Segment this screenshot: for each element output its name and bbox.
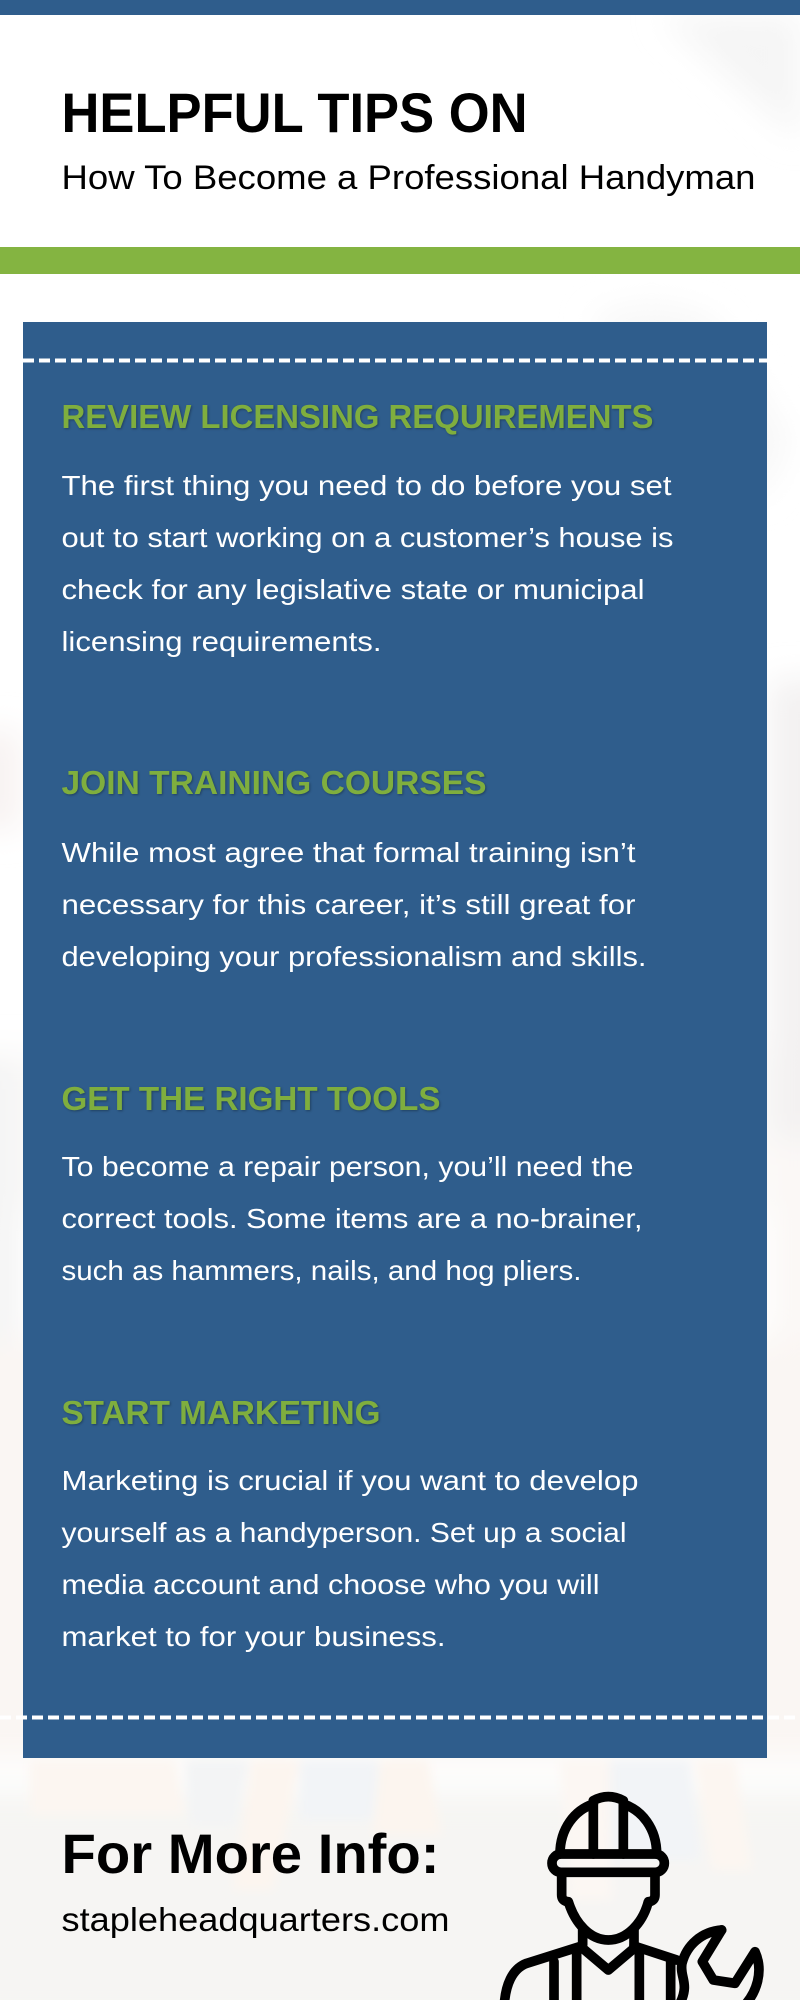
tip 1 — [62, 398, 674, 657]
footer heading: For More Info: — [62, 1822, 440, 1885]
tip 2: While most agree that formal training isn’t — [62, 837, 636, 868]
tip 4: media account and choose who you will — [62, 1569, 600, 1600]
tip 2 — [62, 764, 646, 972]
tip 2: developing your professionalism and skills. — [62, 941, 646, 972]
subtitle: How To Become a Professional Handyman — [62, 159, 756, 197]
tip 4 — [62, 1394, 638, 1652]
title: HELPFUL TIPS ON — [62, 81, 528, 144]
icon: handyman with wrench — [504, 1797, 759, 2000]
tip 4: Marketing is crucial if you want to develop — [62, 1465, 638, 1496]
panel: tips — [0, 322, 800, 1758]
tip 3: such as hammers, nails, and hog pliers. — [62, 1255, 582, 1286]
footer website: stapleheadquarters.com — [62, 1901, 450, 1938]
tip 3: To become a repair person, you’ll need the — [62, 1151, 633, 1182]
tip 1: The first thing you need to do before you set — [62, 470, 672, 501]
green bar — [0, 247, 800, 274]
tip 4: START MARKETING — [62, 1394, 380, 1431]
tip 2: JOIN TRAINING COURSES — [62, 764, 486, 801]
tip 3 — [62, 1080, 642, 1286]
top bar — [0, 0, 800, 15]
tip 1: check for any legislative state or municipal — [62, 574, 644, 605]
tip 1: REVIEW LICENSING REQUIREMENTS — [62, 398, 654, 435]
tip 4: yourself as a handyperson. Set up a social — [62, 1517, 626, 1548]
tip 1: out to start working on a customer’s house is — [62, 522, 674, 553]
tip 1: licensing requirements. — [62, 626, 382, 657]
tip 3: correct tools. Some items are a no-brainer, — [62, 1203, 642, 1234]
tip 3: GET THE RIGHT TOOLS — [62, 1080, 440, 1117]
tip 2: necessary for this career, it’s still great for — [62, 889, 636, 920]
tip 4: market to for your business. — [62, 1621, 446, 1652]
